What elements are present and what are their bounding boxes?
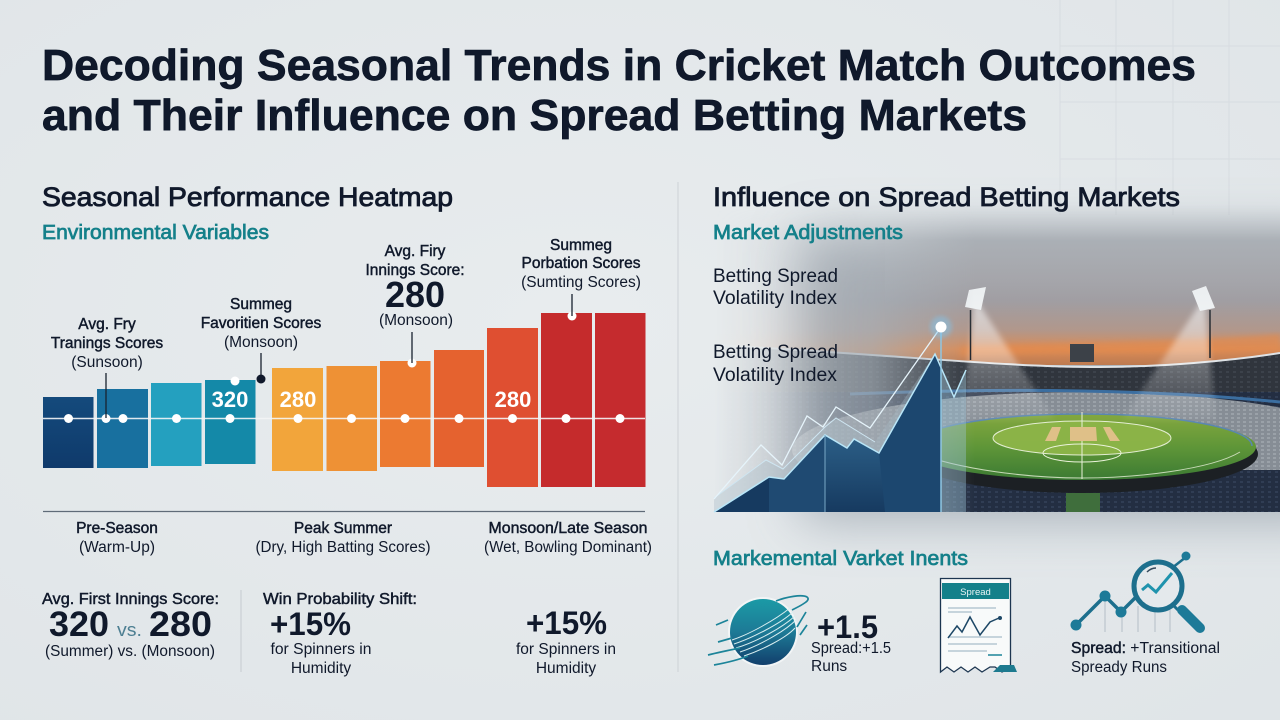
stat: average first innings score bbox=[42, 591, 219, 660]
subheading: environmental variables: Environmental Variables bbox=[42, 222, 269, 244]
stat: win probability shift: for Spinners in bbox=[270, 641, 372, 658]
stat: win probability shift: Win Probability Shift: bbox=[263, 591, 417, 608]
panel: stadium image with volatility chart bbox=[714, 205, 1280, 512]
heatmap bar chart: 320 bbox=[212, 387, 248, 412]
annotation: porbation scores: Porbation Scores bbox=[522, 255, 641, 272]
label: spread transitional runs bbox=[1071, 640, 1220, 676]
label: betting spread volatility index top: Volatility Index bbox=[713, 288, 838, 309]
annotation: favoritien scores: Favoritien Scores bbox=[201, 315, 322, 332]
label: spread transitional runs: Spread: +Transitional bbox=[1071, 640, 1220, 657]
stat: win probability shift: Humidity bbox=[291, 660, 351, 677]
annotation: training scores: Tranings Scores bbox=[51, 335, 163, 352]
season label: peak summer: (Dry, High Batting Scores) bbox=[256, 539, 430, 556]
panel: seasonal performance heatmap bbox=[42, 182, 652, 677]
stat: average first innings score: Avg. First Innings Score: bbox=[42, 591, 219, 608]
annotation: porbation scores bbox=[521, 237, 641, 291]
icon: cricket ball with speed lines bbox=[708, 596, 808, 667]
season label: monsoon/late season: Monsoon/Late Season bbox=[488, 520, 648, 537]
title bbox=[42, 41, 1196, 140]
season label: pre-season bbox=[76, 520, 158, 556]
stat: average first innings score: 320 bbox=[49, 605, 109, 644]
stat: +1.5 spread runs: Spread:+1.5 bbox=[811, 640, 891, 657]
stat: +1.5 spread runs bbox=[811, 609, 891, 675]
season label: monsoon/late season: (Wet, Bowling Dominant) bbox=[484, 539, 652, 556]
title: and Their Influence on Spread Betting Markets bbox=[42, 91, 1027, 140]
season label: peak summer: Peak Summer bbox=[294, 520, 392, 537]
label: betting spread volatility index bottom bbox=[713, 342, 838, 386]
icon: magnifier over trend line bbox=[1070, 552, 1200, 632]
annotation: training scores bbox=[51, 316, 163, 371]
label: spread transitional runs: Spready Runs bbox=[1071, 659, 1167, 676]
stadium scene bbox=[714, 205, 1280, 512]
heading: seasonal performance heatmap: Seasonal Performance Heatmap bbox=[42, 182, 453, 212]
stat: spinners in humidity: for Spinners in bbox=[516, 641, 616, 658]
annotation: innings score 280: Avg. Firy bbox=[385, 243, 446, 260]
stat: win probability shift bbox=[263, 591, 417, 677]
heatmap bar chart: 280 bbox=[280, 387, 316, 412]
label: betting spread volatility index bottom: Volatility Index bbox=[713, 365, 838, 386]
season label: pre-season: (Warm-Up) bbox=[79, 539, 155, 556]
season label: pre-season: Pre-Season bbox=[76, 520, 158, 537]
annotation: favoritien scores: (Monsoon) bbox=[224, 334, 298, 351]
label: betting spread volatility index top bbox=[713, 266, 838, 309]
heading: influence on spread betting markets: Influence on Spread Betting Markets bbox=[713, 182, 1180, 212]
annotation: training scores: Avg. Fry bbox=[78, 316, 136, 333]
annotation: innings score 280 bbox=[365, 243, 465, 329]
annotation: training scores: (Sunsoon) bbox=[71, 354, 143, 371]
grey vignette behind stadium bbox=[800, 235, 1280, 520]
stat: win probability shift: +15% bbox=[270, 606, 351, 642]
annotation: favoritien scores bbox=[201, 296, 322, 351]
season label: peak summer bbox=[256, 520, 430, 556]
label: betting spread volatility index bottom: Betting Spread bbox=[713, 342, 838, 363]
heatmap bar chart: 280 bbox=[495, 387, 531, 412]
stat: average first innings score: (Summer) vs. (Monsoon) bbox=[45, 643, 215, 660]
title: Decoding Seasonal Trends in Cricket Match Outcomes bbox=[42, 41, 1196, 90]
label: betting spread volatility index top: Betting Spread bbox=[713, 266, 838, 287]
stat: +1.5 spread runs: Runs bbox=[811, 658, 847, 675]
subheading: market adjustments: Market Adjustments bbox=[713, 222, 903, 244]
stat: spinners in humidity: +15% bbox=[526, 605, 607, 641]
icon: spread document: Spread bbox=[960, 587, 991, 598]
season label: monsoon/late season bbox=[484, 520, 652, 556]
heatmap bar chart bbox=[43, 294, 646, 487]
stat: spinners in humidity: Humidity bbox=[536, 660, 596, 677]
subheading: markemental varket inents: Markemental Varket Inents bbox=[713, 548, 968, 570]
annotation: porbation scores: Summeg bbox=[550, 237, 612, 254]
annotation: porbation scores: (Sumting Scores) bbox=[521, 274, 641, 291]
floodlights bbox=[962, 298, 1216, 420]
stat: average first innings score: vs. bbox=[117, 620, 142, 640]
annotation: innings score 280: 280 bbox=[385, 274, 445, 315]
annotation: favoritien scores: Summeg bbox=[230, 296, 292, 313]
stat: average first innings score: 280 bbox=[149, 605, 212, 644]
annotation: innings score 280: (Monsoon) bbox=[379, 312, 453, 329]
icon: spread document bbox=[940, 578, 1017, 672]
stat: spinners in humidity bbox=[516, 605, 616, 677]
annotation: innings score 280: Innings Score: bbox=[365, 262, 465, 279]
stat: +1.5 spread runs: +1.5 bbox=[817, 609, 878, 645]
volatility area chart bbox=[714, 316, 966, 512]
